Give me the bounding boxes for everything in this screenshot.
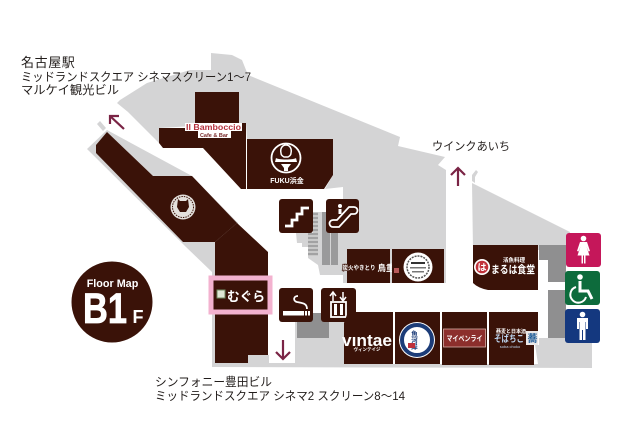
badge: Floor Map B1F: Floor Map xyxy=(87,278,139,290)
shop: Mugura highlighted: むぐら xyxy=(227,289,265,304)
icon: men's restroom xyxy=(565,309,600,343)
shop: vintae: ヴィンテイジ xyxy=(354,346,381,353)
floor plan: walkway and back-of-house areas xyxy=(87,53,592,368)
shop: round emblem logo xyxy=(392,249,444,283)
icon: elevator xyxy=(321,288,356,322)
shop: Mai Pen Rai: マイペンライ xyxy=(446,334,482,343)
badge: Floor Map B1F: F xyxy=(132,307,144,327)
shop: Il Bamboccio: Cafe & Bar xyxy=(200,133,229,139)
shop: Maruha Shokudo: 活魚料理 xyxy=(503,256,525,264)
shop: Il Bamboccio: Il Bamboccio xyxy=(186,122,241,132)
arrow: to Symphony Toyota Building xyxy=(276,340,290,359)
badge: Floor Map B1F xyxy=(72,262,152,342)
shop: FUKU xyxy=(247,139,333,189)
label: south destinations xyxy=(155,375,405,403)
shop: Sobachoko: そばちこ xyxy=(494,333,524,345)
icon: accessible restroom xyxy=(565,271,600,305)
shop: vintae: vıntae xyxy=(342,331,392,350)
heading: north destinations: ミッドランドスクエア シネマスクリーン1〜7 xyxy=(21,70,251,84)
heading: north destinations: マルケイ観光ビル xyxy=(21,83,119,97)
shop: Torishige grill: 鳥重 xyxy=(377,263,395,273)
shop: Maruha Shokudo xyxy=(473,245,538,290)
shop: Maruha Shokudo: は xyxy=(477,262,487,272)
icon: stairs xyxy=(279,199,313,233)
shop: Sobachoko: soba choko xyxy=(500,344,521,349)
shop: Sobachoko: 蕎 xyxy=(528,332,538,345)
shop: Mai Pen Rai xyxy=(442,312,487,365)
shop: Il Bamboccio xyxy=(159,92,246,189)
shop: Mugura highlighted xyxy=(211,223,270,363)
icon: women's restroom xyxy=(566,233,601,267)
icon: smoking area xyxy=(279,288,313,322)
shop: Sobachoko: 蕎麦と日本酒 xyxy=(496,328,526,335)
shop: Maruha Shokudo: まるは食堂 xyxy=(491,263,535,276)
shop: FUKU: FUKU浜金 xyxy=(270,176,304,185)
shop: Torishige grill xyxy=(342,249,395,283)
arrow: to Wink Aichi xyxy=(451,168,465,186)
shop: diagonal shop with round logo xyxy=(96,132,237,242)
heading: north destinations xyxy=(21,55,251,97)
label: south destinations: ミッドランドスクエア シネマ2 スクリーン8〜14 xyxy=(155,389,405,403)
icon: escalator xyxy=(326,199,359,233)
shop: round blue seafood logo: 魚河岸 xyxy=(410,329,418,351)
badge: Floor Map B1F: B1 xyxy=(83,285,127,333)
arrow: to Nagoya Station xyxy=(110,116,124,129)
label: east destination: ウインクあいち xyxy=(432,140,510,153)
heading: north destinations: 名古屋駅 xyxy=(21,55,75,70)
shop: round blue seafood logo xyxy=(395,312,440,364)
shop: Sobachoko xyxy=(489,312,539,365)
shop: Torishige grill: 炭火やきとり xyxy=(342,264,376,272)
label: south destinations: シンフォニー豊田ビル xyxy=(155,375,272,389)
shop: vintae xyxy=(342,312,393,364)
